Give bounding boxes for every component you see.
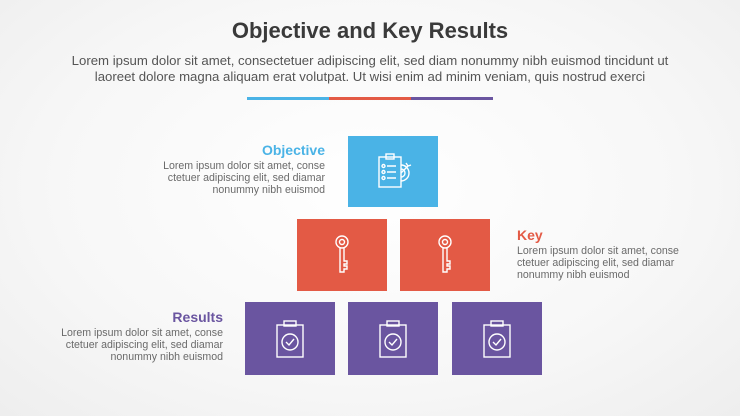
icon: clipboard check: [379, 320, 407, 358]
icon: key: [438, 235, 452, 273]
text: results: ctetuer adipiscing elit, sed diamar: [66, 339, 223, 351]
title: Objective and Key Results: [232, 18, 508, 43]
text: results: [61, 309, 223, 363]
results box 3: [452, 302, 542, 375]
text: key: ctetuer adipiscing elit, sed diamar: [517, 257, 674, 269]
subtitle: [72, 53, 668, 84]
text: key: [517, 227, 679, 281]
text: results: Results: [172, 309, 223, 325]
icon: key: [335, 235, 349, 273]
icon: clipboard check: [483, 320, 511, 358]
text: results: Lorem ipsum dolor sit amet, conse: [61, 327, 223, 339]
icon: clipboard target: [378, 153, 412, 188]
divider: [247, 97, 493, 100]
results box 2: [348, 302, 438, 375]
text: objective: Lorem ipsum dolor sit amet, conse: [163, 160, 325, 172]
text: objective: nonummy nibh euismod: [213, 184, 325, 196]
subtitle: Lorem ipsum dolor sit amet, consectetuer adipiscing elit, sed diam nonummy nibh euismod tincidunt ut: [72, 53, 668, 68]
key box 2: [400, 219, 490, 291]
objective box: [348, 136, 438, 207]
subtitle: laoreet dolore magna aliquam erat volutpat. Ut wisi enim ad minim veniam, quis nostrud exerci: [95, 68, 645, 84]
text: objective: Objective: [262, 142, 325, 158]
results box 1: [245, 302, 335, 375]
text: key: Key: [517, 227, 543, 243]
text: objective: ctetuer adipiscing elit, sed diamar: [168, 172, 325, 184]
text: key: Lorem ipsum dolor sit amet, conse: [517, 245, 679, 257]
icon: clipboard check: [276, 320, 304, 358]
key box 1: [297, 219, 387, 291]
text: results: nonummy nibh euismod: [111, 351, 223, 363]
text: key: nonummy nibh euismod: [517, 269, 629, 281]
text: objective: [163, 142, 325, 196]
